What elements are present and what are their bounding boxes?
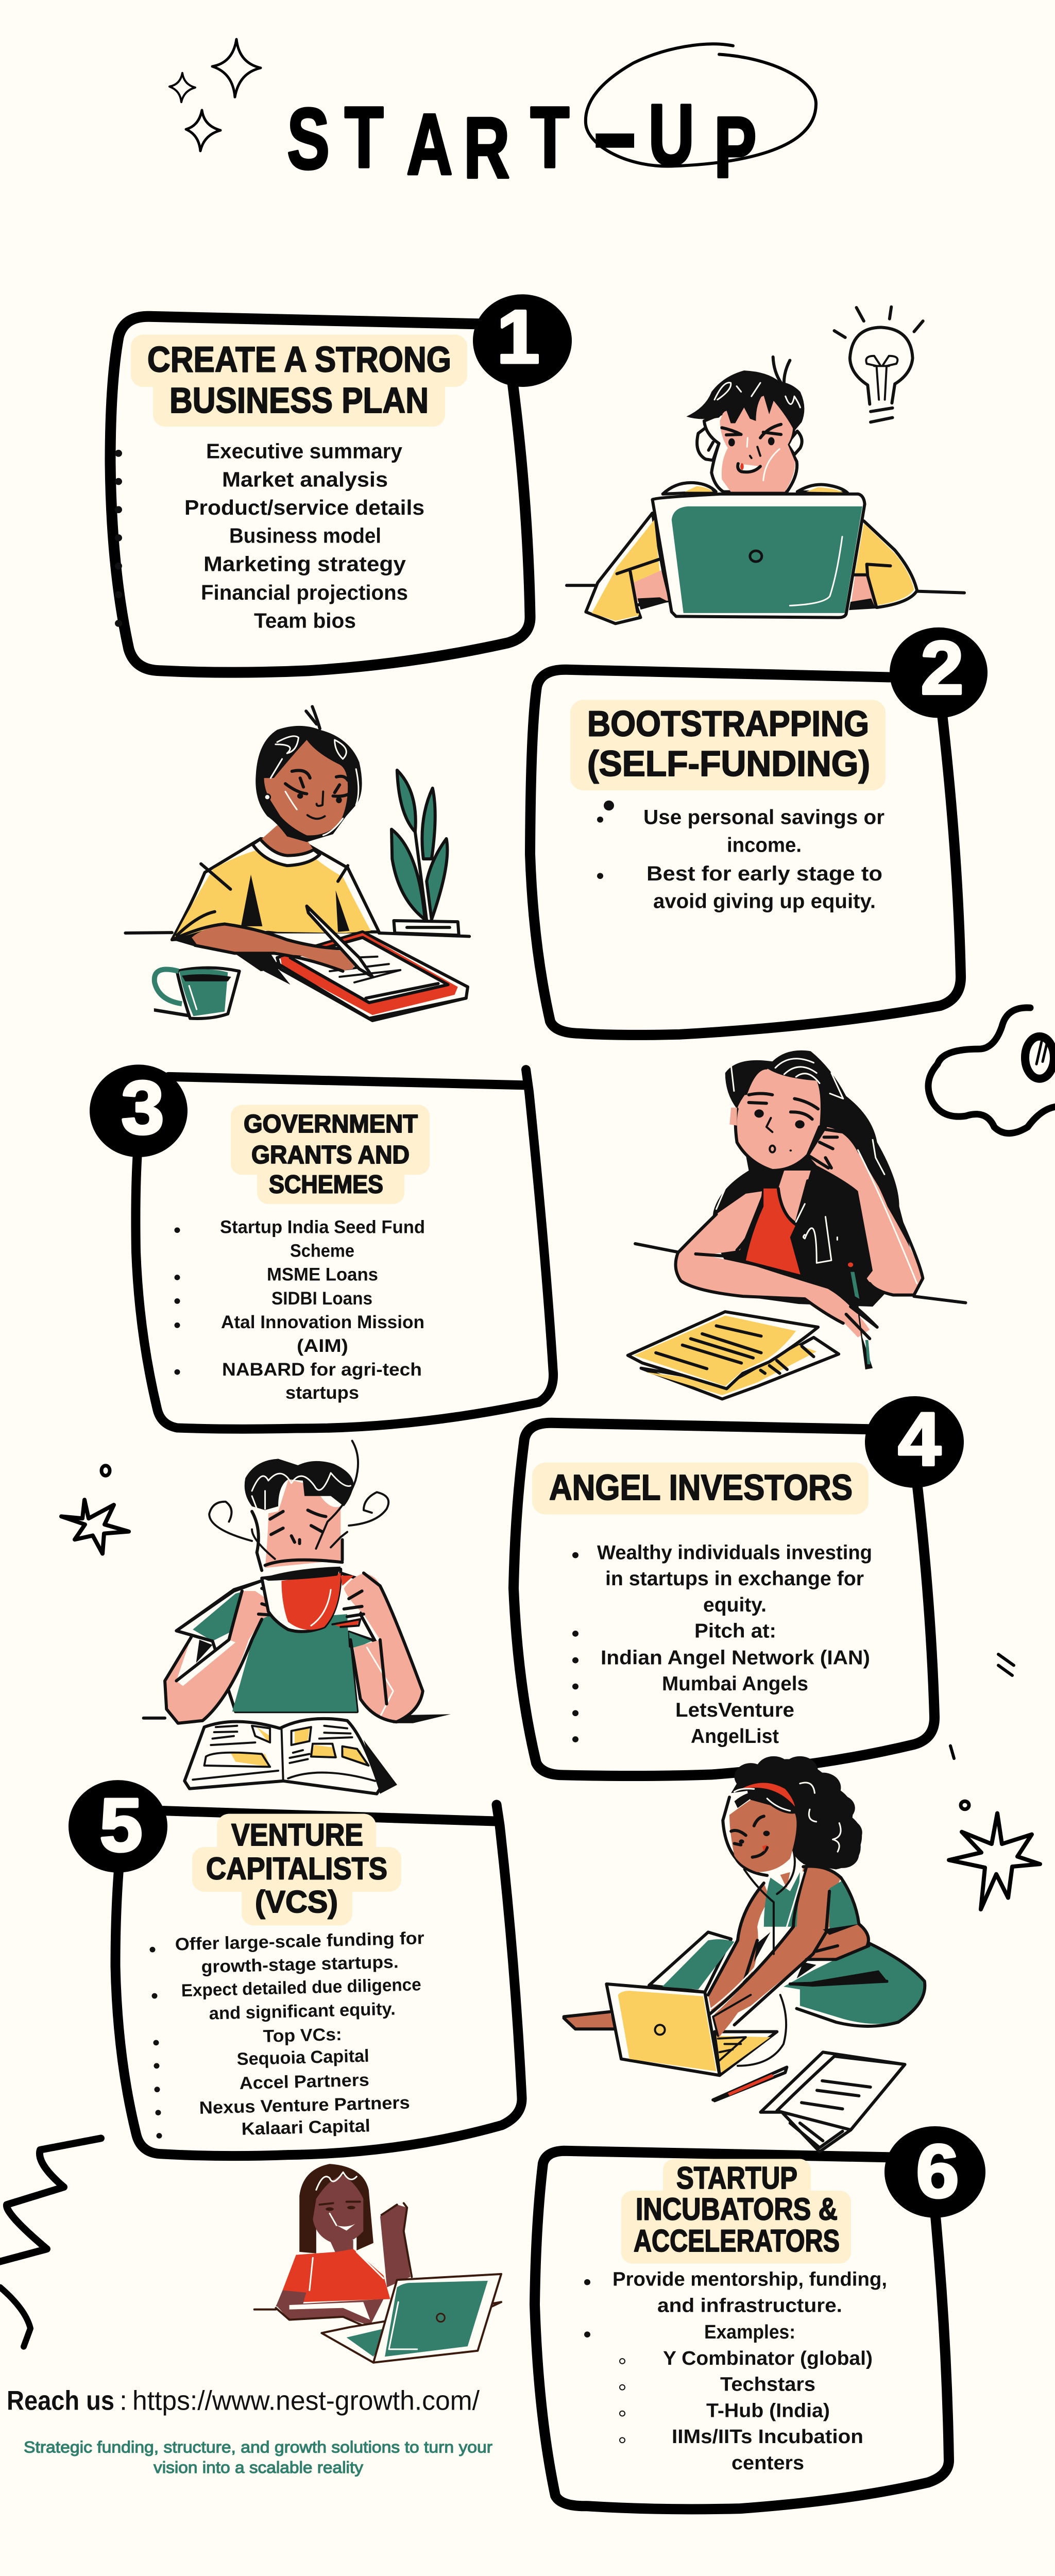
heading 6 [634, 2161, 840, 2258]
tagline: vision into a scalable reality [154, 2458, 363, 2477]
heading highlight 3 [231, 1105, 430, 1204]
badge 6: 6 [916, 2129, 959, 2213]
list 2 [597, 801, 884, 913]
list 2: Use personal savings or [643, 805, 884, 829]
list 3: SIDBI Loans [271, 1289, 372, 1309]
heading 6: INCUBATORS & [636, 2192, 838, 2226]
heading 5: VENTURE [231, 1818, 363, 1852]
badge 4: 4 [898, 1397, 941, 1481]
panel 2: bootstrapping [530, 626, 988, 1035]
list 5: Expect detailed due diligence [181, 1975, 421, 2001]
heading highlight 2 [570, 700, 886, 790]
contact line: : [120, 2386, 127, 2416]
heading 3: GRANTS AND [251, 1141, 410, 1169]
heading highlight 6 [621, 2159, 851, 2264]
title text: START [287, 89, 569, 196]
heading highlight 4 [532, 1463, 869, 1514]
heading 1: BUSINESS PLAN [169, 380, 429, 420]
frame 2 [530, 670, 961, 1035]
badge 4 [865, 1396, 964, 1488]
list 3: NABARD for agri-tech [222, 1359, 422, 1380]
heading highlight 1 [131, 334, 467, 427]
heading highlight 5 [192, 1814, 401, 1925]
list 6: IIMs/IITs Incubation [672, 2426, 863, 2448]
list 3: (AIM) [297, 1335, 348, 1356]
frame 4 [514, 1423, 934, 1776]
list 6: Y Combinator (global) [663, 2347, 873, 2369]
list 1: Executive summary [206, 439, 402, 463]
list 4: AngelList [691, 1725, 779, 1748]
title text [287, 74, 757, 196]
left squiggle [0, 2138, 101, 2347]
list 5: and significant equity. [209, 1999, 396, 2024]
sparkle star left [61, 1466, 129, 1554]
contact line: Reach us [7, 2386, 114, 2416]
badge 1 [473, 294, 572, 387]
list 1: Business model [229, 523, 381, 548]
illustration: woman writing on tablet [125, 707, 469, 1021]
list 4 [572, 1541, 872, 1748]
heading 3: SCHEMES [269, 1171, 383, 1198]
list 3: Scheme [290, 1241, 354, 1261]
sparkle icons [169, 39, 261, 151]
frame 1 [110, 316, 530, 672]
heading 2 [587, 703, 870, 784]
heading 1 [147, 339, 451, 420]
list 6: centers [731, 2452, 804, 2474]
list 1: Team bios [254, 608, 356, 633]
list 5: growth-stage startups. [201, 1953, 399, 1977]
list 3: MSME Loans [267, 1264, 378, 1284]
heading 3: GOVERNMENT [244, 1110, 418, 1138]
list 3 [174, 1217, 425, 1403]
tagline [24, 2438, 492, 2477]
heading 5: (VCS) [255, 1885, 338, 1919]
list 5 [149, 1928, 424, 2139]
list 1: Marketing strategy [203, 552, 406, 575]
list 6: and infrastructure. [657, 2295, 842, 2316]
title text: UP [649, 87, 757, 196]
list 1: Product/service details [184, 495, 424, 519]
list 3: startups [285, 1382, 359, 1403]
badge 5 [69, 1780, 167, 1873]
badge 1: 1 [497, 295, 540, 379]
list 4: LetsVenture [675, 1699, 794, 1721]
list 5: Sequoia Capital [236, 2046, 369, 2069]
sparkle star right [949, 1654, 1040, 1909]
illustration: waving woman with green laptop [254, 2164, 501, 2363]
heading 2: BOOTSTRAPPING [587, 703, 869, 744]
list 4: in startups in exchange for [605, 1568, 864, 1590]
heading 5 [206, 1818, 387, 1919]
tagline: Strategic funding, structure, and growth solutions to turn your [24, 2438, 492, 2456]
list 6: Techstars [720, 2374, 815, 2396]
list 1 [115, 439, 424, 633]
illustration: man drinking coffee with book [144, 1441, 451, 1794]
list 1: Financial projections [201, 581, 408, 604]
panel 5: venture capitalists [69, 1780, 522, 2156]
list 2: Best for early stage to [646, 861, 882, 885]
list 5: Top VCs: [263, 2025, 342, 2046]
illustration: man with laptop and light bulb [567, 307, 964, 623]
badge 3 [90, 1064, 188, 1157]
list 6: Provide mentorship, funding, [612, 2268, 887, 2290]
title [169, 39, 816, 196]
list 2: avoid giving up equity. [653, 889, 876, 913]
badge 6 [884, 2126, 985, 2218]
heading 3 [244, 1110, 418, 1198]
illustration: woman seated with yellow laptop [564, 1756, 925, 2151]
heading 6: STARTUP [676, 2161, 797, 2195]
heading 6: ACCELERATORS [634, 2224, 840, 2258]
illustration: woman thinking with papers [628, 1050, 965, 1399]
panel 4: angel investors [514, 1396, 964, 1776]
frame 5 [115, 1805, 522, 2156]
title oval [586, 44, 816, 166]
list 4: equity. [703, 1594, 767, 1616]
badge 2: 2 [921, 626, 964, 710]
list 6: Examples: [704, 2321, 795, 2343]
contact line: https://www.nest-growth.com/ [132, 2386, 480, 2416]
list 3: Atal Innovation Mission [221, 1312, 424, 1332]
list 4: Indian Angel Network (IAN) [601, 1647, 870, 1669]
list 3: Startup India Seed Fund [220, 1217, 425, 1237]
list 5: Nexus Venture Partners [199, 2093, 410, 2118]
list 1: Market analysis [222, 467, 388, 491]
panel 3: government grants [90, 1064, 553, 1429]
list 6: T-Hub (India) [706, 2400, 830, 2421]
badge 3: 3 [121, 1066, 164, 1150]
badge 5: 5 [99, 1783, 143, 1867]
heading 2: (SELF-FUNDING) [587, 743, 870, 784]
heading 1: CREATE A STRONG [147, 339, 451, 380]
decorative flower blob [928, 1008, 1055, 1133]
list 4: Mumbai Angels [662, 1673, 808, 1695]
list 5: Offer large-scale funding for [175, 1928, 424, 1954]
list 4: Pitch at: [694, 1620, 776, 1642]
list 4: Wealthy individuals investing [597, 1541, 872, 1564]
heading 4: ANGEL INVESTORS [549, 1467, 853, 1507]
title text: - [591, 74, 639, 190]
list 6 [584, 2268, 887, 2474]
badge 2 [890, 626, 988, 718]
list 5: Accel Partners [239, 2071, 369, 2093]
panel 1: business plan [110, 294, 572, 672]
panel 6: incubators [535, 2126, 985, 2509]
list 2: income. [727, 833, 802, 856]
frame 3 [135, 1070, 553, 1429]
heading 5: CAPITALISTS [206, 1851, 387, 1886]
frame 6 [535, 2151, 949, 2509]
list 5: Kalaari Capital [241, 2116, 370, 2139]
